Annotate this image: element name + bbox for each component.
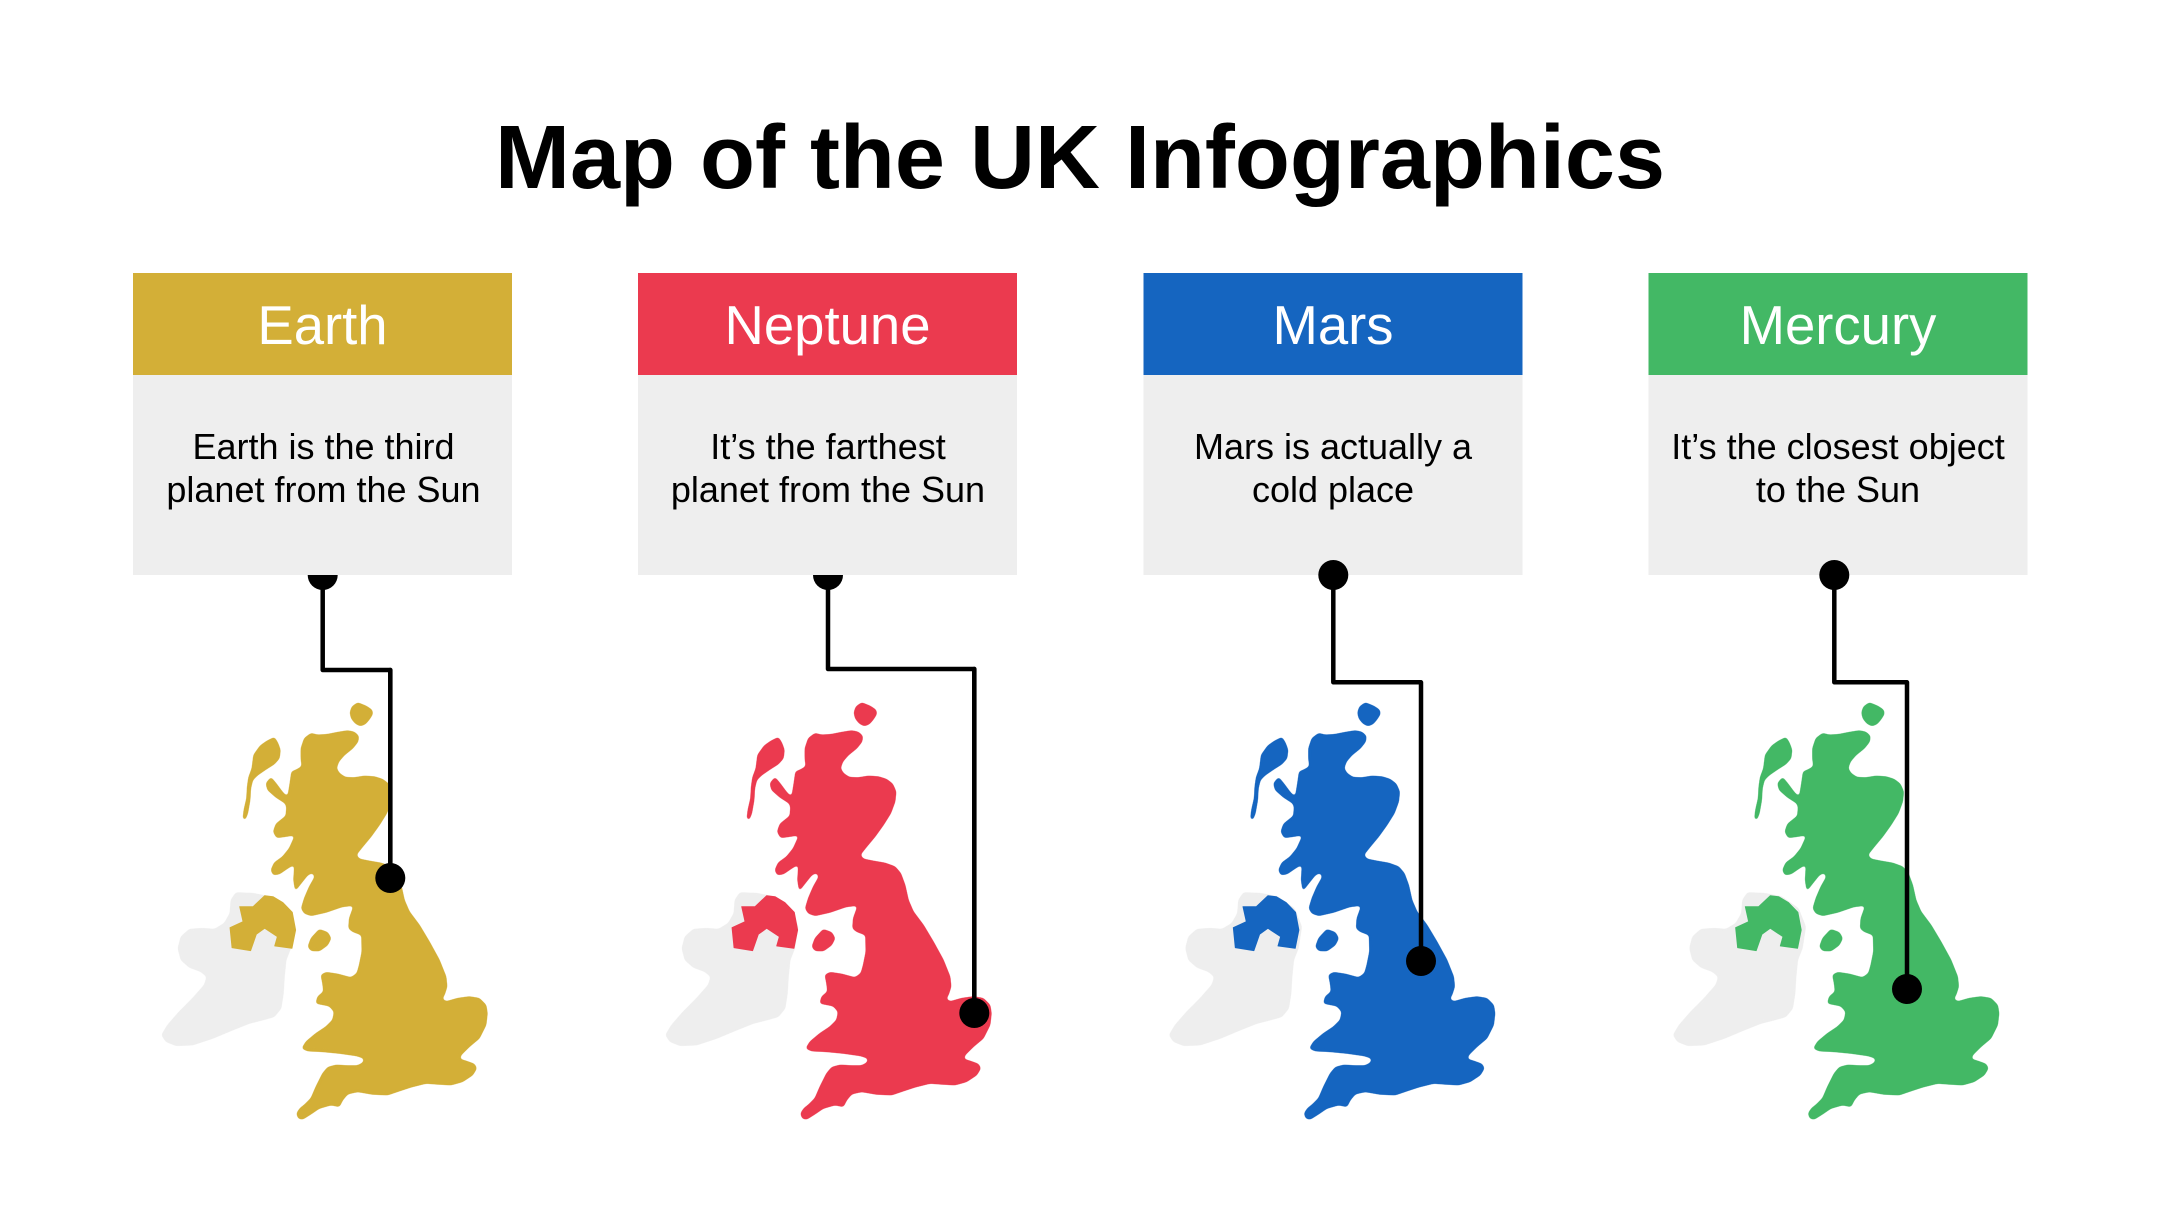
connector end: Earth [375, 670, 405, 893]
Earth card body [133, 375, 512, 575]
map: Mars [1169, 703, 1495, 1119]
Mars description: cold place [1252, 469, 1414, 510]
panel: Mercury [1648, 273, 2028, 1119]
panel: Neptune [638, 273, 1017, 1119]
Neptune card body [638, 375, 1017, 575]
Neptune header [638, 273, 1017, 375]
Earth header: Earth [257, 295, 388, 356]
Mercury description: It’s the closest object [1671, 426, 2005, 467]
panel: Mars [1144, 273, 1522, 1119]
connector end: Neptune [959, 669, 989, 1028]
connector: Mercury [1819, 560, 1922, 1004]
map: Earth [162, 703, 487, 1119]
title: Map of the UK Infographics [495, 108, 1665, 208]
panel: Earth [133, 273, 512, 1119]
Mars description: Mars is actually a [1194, 426, 1473, 467]
Earth description: planet from the Sun [166, 469, 481, 510]
connector: Mars [1318, 560, 1436, 976]
Mars header [1144, 273, 1522, 375]
Mercury card body [1648, 375, 2028, 575]
map: Mercury [1673, 703, 1999, 1119]
Mars header: Mars [1272, 295, 1394, 356]
Neptune description: planet from the Sun [671, 469, 985, 510]
Neptune header: Neptune [724, 295, 931, 356]
Mars card body [1144, 375, 1522, 575]
Mercury header: Mercury [1740, 295, 1937, 356]
Mercury header [1648, 273, 2028, 375]
connector: Neptune [813, 560, 974, 1013]
map: Neptune [666, 703, 991, 1119]
connector: Earth [308, 560, 390, 878]
Neptune description: It’s the farthest [710, 426, 946, 467]
Earth header [133, 273, 512, 375]
Mercury description: to the Sun [1756, 469, 1920, 510]
Earth description: Earth is the third [192, 426, 455, 467]
